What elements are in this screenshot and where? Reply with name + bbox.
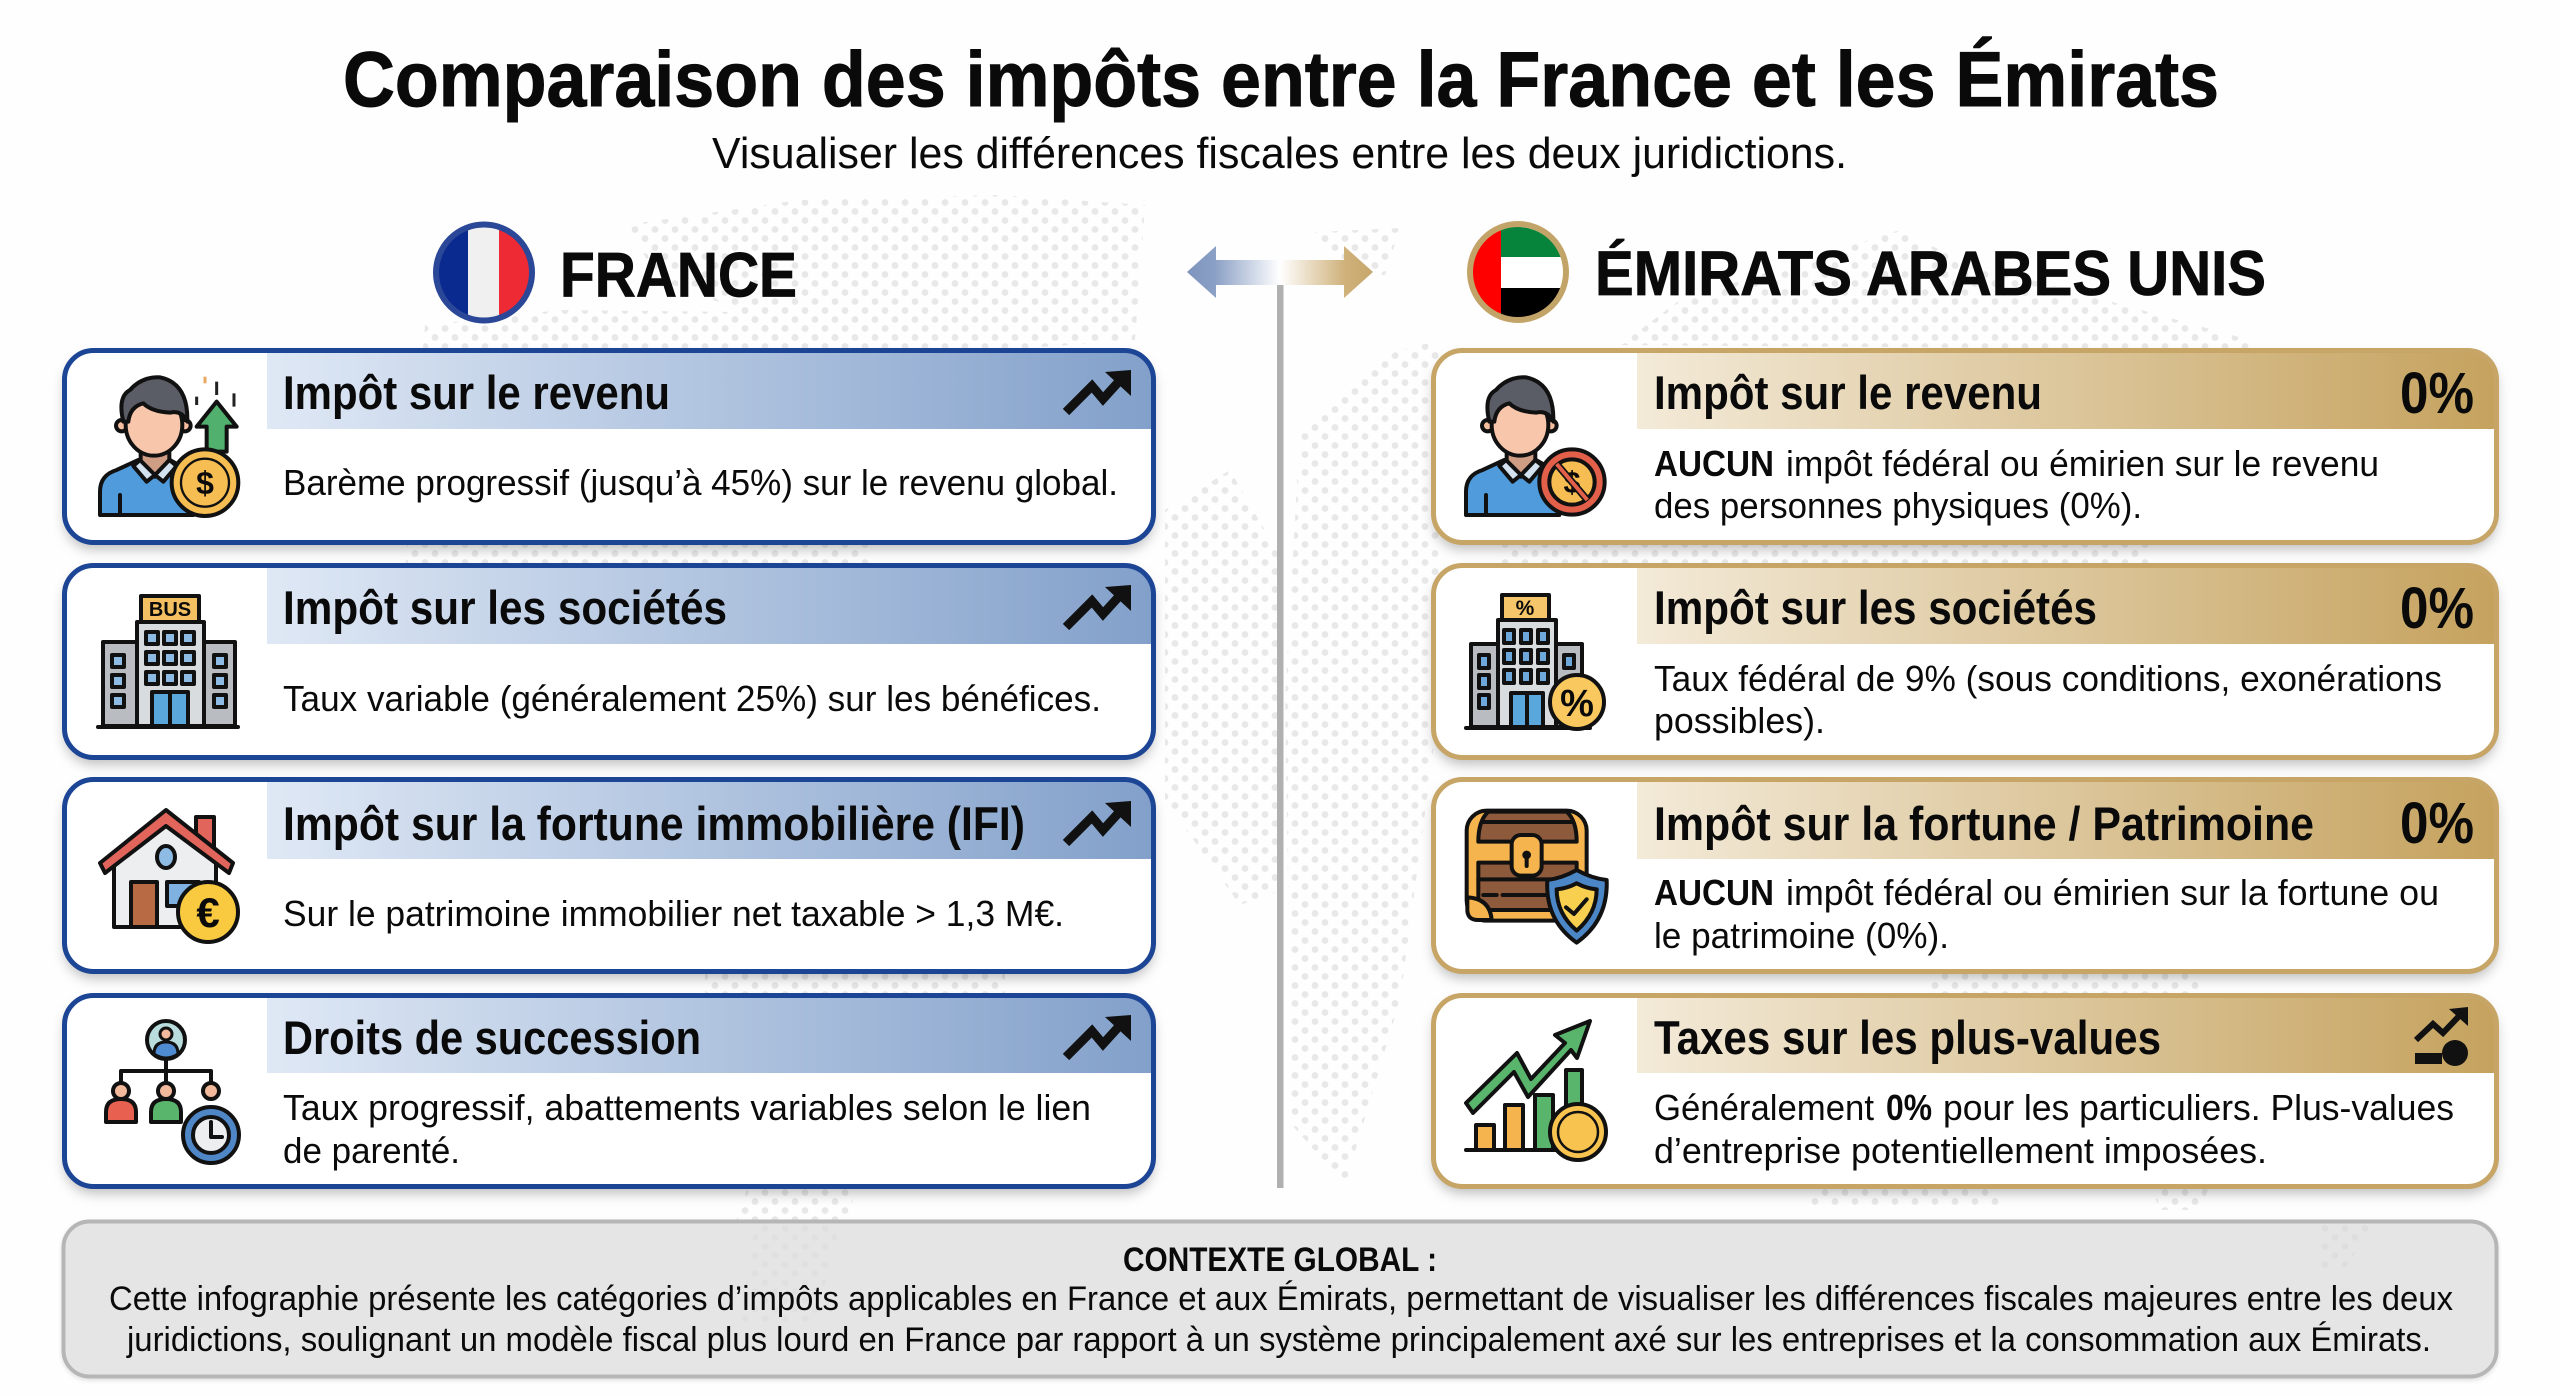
heading: Impôt sur les sociétés <box>1654 581 2097 634</box>
text: Taux progressif, abattements variables selon le lien <box>283 1087 1091 1128</box>
heading: Impôt sur la fortune / Patrimoine <box>1654 797 2314 850</box>
text: Taux variable (généralement 25%) sur les bénéfices. <box>283 678 1101 719</box>
text: Sur le patrimoine immobilier net taxable > 1,3 M€. <box>283 893 1064 934</box>
panel: France real-estate wealth tax <box>64 780 1154 972</box>
heading: Impôt sur les sociétés <box>283 581 727 634</box>
panel: France income tax <box>64 350 1154 542</box>
text: juridictions, soulignant un modèle fiscal plus lourd en France par rapport à un système principalement axé sur les entreprises et la consommation aux Émirats. <box>126 1321 2431 1359</box>
heading: Émirats arabes unis: ÉMIRATS ARABES UNIS <box>1595 239 2266 309</box>
world map dotted background <box>405 195 2260 1225</box>
icon: treasure chest with shield <box>1467 811 1607 943</box>
text <box>109 1280 2453 1359</box>
icon: person with coin and up arrow: $ <box>196 465 214 501</box>
text: des personnes physiques (0%). <box>1654 485 2142 526</box>
icon: office building with percent coin <box>1466 595 1604 729</box>
text <box>1654 658 2442 741</box>
text: possibles). <box>1654 700 1825 741</box>
text <box>1654 1087 2454 1171</box>
text: 0% <box>1886 1087 1932 1128</box>
zero percent: 0% <box>2400 361 2474 426</box>
heading: France: FRANCE <box>560 240 797 310</box>
title: Comparaison des impôts entre la France et les Émirats <box>343 35 2219 123</box>
icon: office building with percent coin: % <box>1560 683 1594 725</box>
panel: UAE income tax <box>1434 350 2496 542</box>
text: AUCUN <box>1654 443 1774 484</box>
text <box>1654 872 2439 956</box>
text: impôt fédéral ou émirien sur la fortune ou <box>1786 872 2439 913</box>
text: Cette infographie présente les catégories d’impôts applicables en France et aux Émirats, permettant de visualiser les différences fiscales majeures entre les deux <box>109 1280 2453 1318</box>
icon: person with coin and up arrow <box>100 377 238 516</box>
icon: office building with percent coin: % <box>1516 597 1535 620</box>
center divider <box>1277 285 1284 1188</box>
text: Généralement <box>1654 1087 1874 1128</box>
icon: person with crossed-out coin: $ <box>1563 466 1581 500</box>
icon: France flag <box>436 224 532 320</box>
text: d’entreprise potentiellement imposées. <box>1654 1130 2267 1171</box>
text: de parenté. <box>283 1130 460 1171</box>
icon: UAE flag <box>1470 224 1566 320</box>
panel: France corporate tax <box>64 566 1154 758</box>
panel: global context <box>64 1222 2496 1376</box>
zero percent: 0% <box>2400 576 2474 641</box>
icon: house with euro coin <box>100 810 238 942</box>
icon: trend up <box>1066 1015 1131 1057</box>
icon: trend up <box>1066 585 1131 627</box>
heading: Droits de succession <box>283 1011 701 1064</box>
text <box>1654 443 2379 526</box>
text: pour les particuliers. Plus-values <box>1943 1087 2454 1128</box>
heading: Impôt sur le revenu <box>1654 366 2042 419</box>
panel: UAE wealth tax <box>1434 780 2496 972</box>
icon: trend up <box>1066 370 1131 412</box>
zero percent: 0% <box>2400 791 2474 856</box>
icon: office building: BUS <box>149 599 191 621</box>
heading: Impôt sur le revenu <box>283 366 670 419</box>
text <box>283 1087 1091 1171</box>
text: le patrimoine (0%). <box>1654 915 1949 956</box>
icon: growth chart with coin <box>1466 1021 1606 1160</box>
icon: trend with zero <box>2415 1007 2468 1066</box>
heading: Impôt sur la fortune immobilière (IFI) <box>283 797 1025 850</box>
panel: France inheritance <box>64 996 1154 1186</box>
panel: UAE corporate tax <box>1434 566 2496 758</box>
icon: house with euro coin: € <box>196 889 220 936</box>
text: Taux fédéral de 9% (sous conditions, exonérations <box>1654 658 2442 699</box>
panel: UAE capital gains <box>1434 996 2496 1186</box>
text: AUCUN <box>1654 872 1774 913</box>
text: Barème progressif (jusqu’à 45%) sur le revenu global. <box>283 462 1118 503</box>
icon: person with crossed-out coin <box>1466 377 1605 515</box>
icon: family tree with clock <box>106 1021 239 1163</box>
arrow: two-way comparison <box>1187 246 1373 298</box>
text: impôt fédéral ou émirien sur le revenu <box>1786 443 2379 484</box>
heading: Taxes sur les plus-values <box>1654 1011 2161 1064</box>
icon: trend up <box>1066 801 1131 843</box>
icon: office building <box>98 596 238 727</box>
subtitle: Visualiser les différences fiscales entre les deux juridictions. <box>712 129 1847 178</box>
heading: CONTEXTE GLOBAL : <box>1123 1241 1437 1279</box>
